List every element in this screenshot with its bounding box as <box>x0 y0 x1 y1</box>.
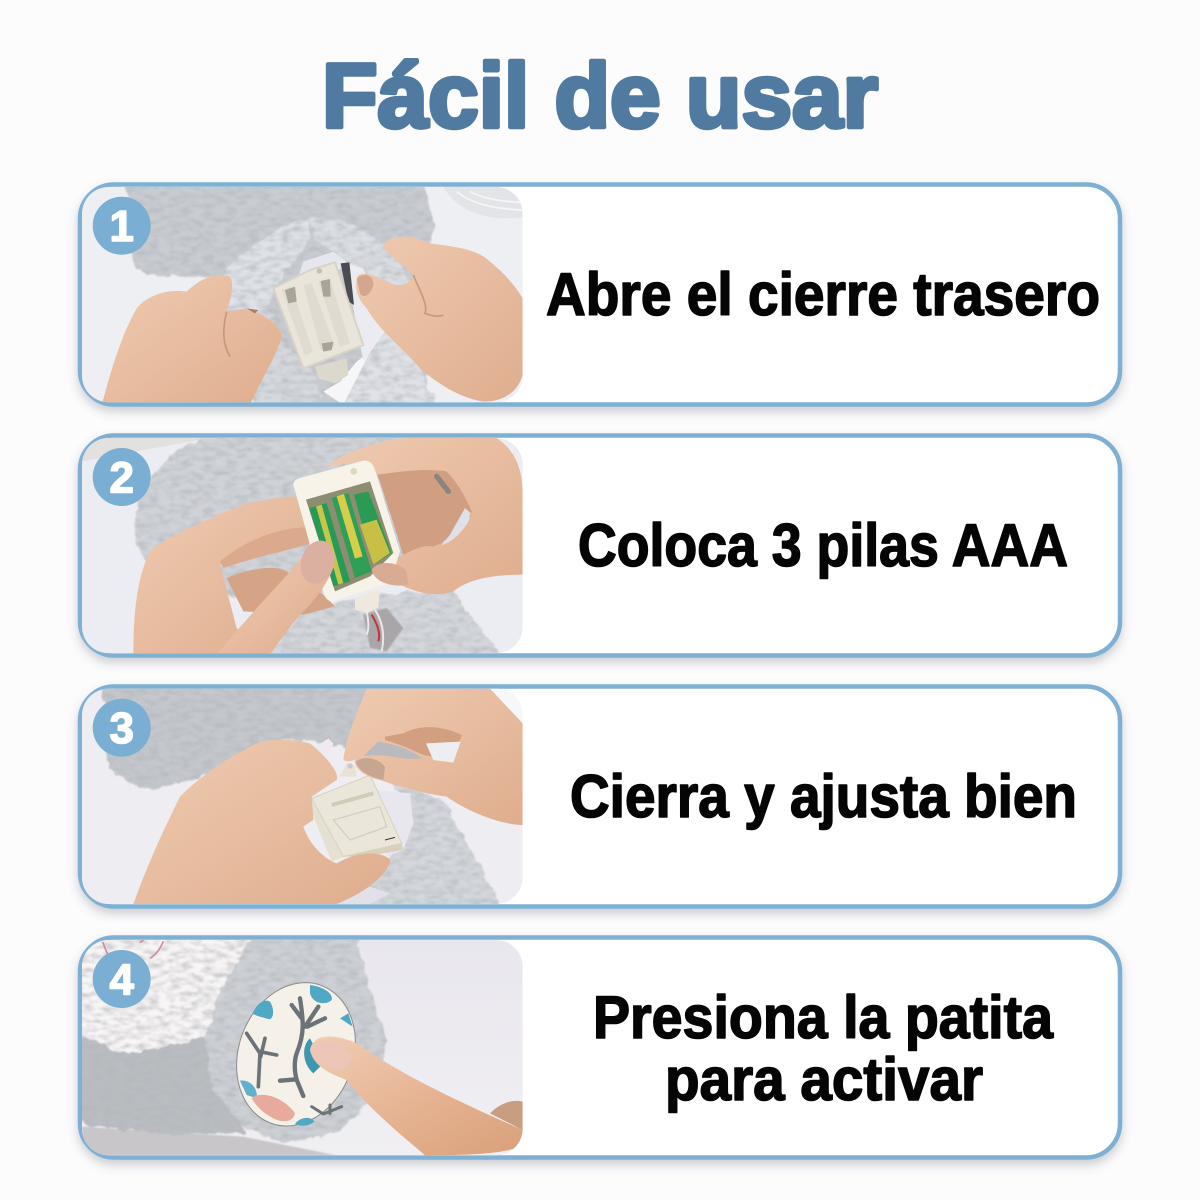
step number badge: 1 <box>109 202 134 251</box>
step text: Abre el cierre trasero <box>546 261 1100 328</box>
photo: pressing the paw <box>77 933 523 1155</box>
panel: step 4 <box>77 933 1120 1158</box>
step number badge: 2 <box>109 454 134 502</box>
photo: closing and adjusting <box>82 683 523 910</box>
card frame <box>80 436 1120 656</box>
panel: step 2 <box>80 435 1120 658</box>
photo: opening the back zipper <box>82 182 523 408</box>
step text: Presiona la patita <box>593 984 1054 1051</box>
step number badge <box>93 950 151 1008</box>
step number badge: 3 <box>109 704 134 753</box>
step number badge <box>93 699 151 757</box>
step text <box>593 984 1054 1113</box>
step text: Coloca 3 pilas AAA <box>578 512 1068 579</box>
photo: inserting AAA batteries <box>82 435 523 658</box>
card frame <box>80 184 1120 404</box>
step text: para activar <box>665 1046 983 1113</box>
card frame <box>80 686 1120 906</box>
panel: step 3 <box>80 683 1120 910</box>
title: Fácil de usar <box>322 46 878 147</box>
step number badge <box>93 448 151 506</box>
step number badge: 4 <box>109 956 134 1004</box>
step text: Cierra y ajusta bien <box>570 763 1077 830</box>
card frame <box>80 938 1120 1158</box>
panel: step 1 <box>80 182 1120 408</box>
step number badge <box>93 197 151 255</box>
